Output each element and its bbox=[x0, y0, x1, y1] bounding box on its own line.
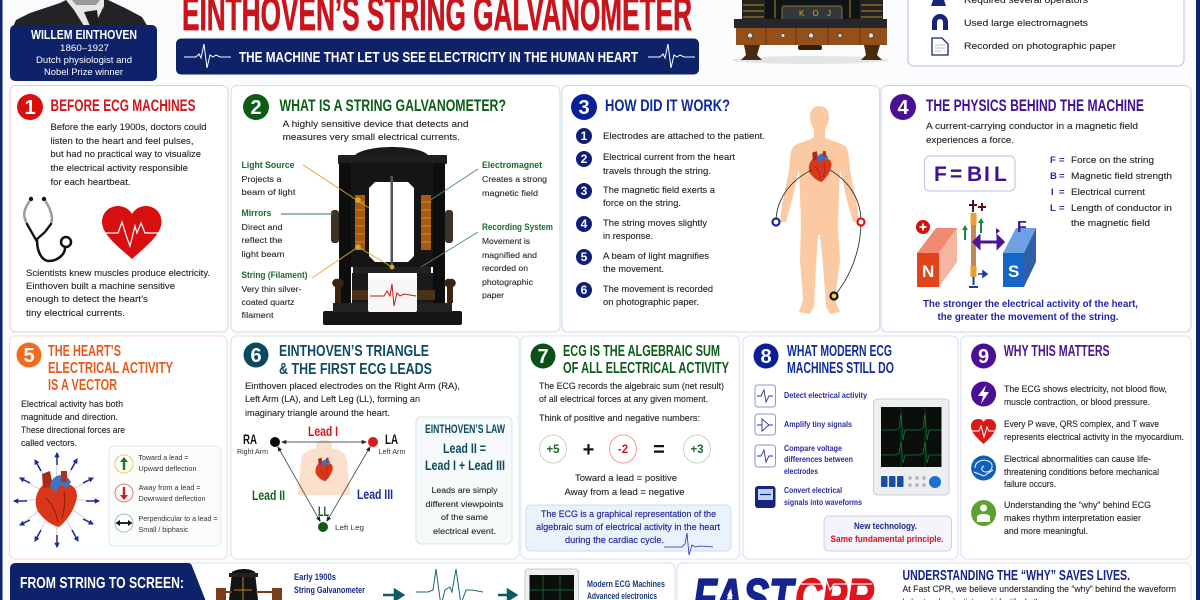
name plate bbox=[10, 25, 157, 81]
function: compare: differences between bbox=[784, 454, 853, 464]
formula legend: = bbox=[1059, 155, 1065, 166]
modern ECG label: Modern ECG Machines bbox=[587, 579, 665, 589]
name plate: Nobel Prize winner bbox=[44, 67, 124, 78]
step 4 bbox=[576, 216, 707, 242]
algebraic text: of all electrical forces at any given moment. bbox=[539, 394, 708, 405]
label: recording system: magnified and bbox=[482, 250, 537, 260]
step 3: 3 bbox=[581, 184, 588, 198]
callout: graphical representation bbox=[526, 505, 731, 555]
illustration: magnets and string: N bbox=[922, 262, 934, 281]
illustration: magnets and string: S bbox=[1008, 262, 1019, 281]
label: string filament: filament bbox=[242, 310, 274, 320]
Einthoven's law box: different viewpoints bbox=[426, 499, 504, 509]
label: recording system: paper bbox=[482, 290, 504, 300]
badge 4: 4 bbox=[897, 97, 909, 119]
label: string filament bbox=[242, 270, 308, 320]
illustration: human body with electrodes bbox=[772, 106, 864, 314]
label: mirrors: light beam bbox=[242, 249, 284, 259]
illustration: magnets and string: F bbox=[1017, 219, 1027, 236]
heading 2: WHAT IS A STRING GALVANOMETER? bbox=[280, 96, 506, 115]
function: compare: electrodes bbox=[784, 466, 818, 476]
badge 3 bbox=[571, 94, 597, 120]
badge 5: 5 bbox=[23, 345, 35, 367]
badge 5 bbox=[16, 342, 42, 368]
arrow 1 bbox=[383, 590, 403, 600]
equation bbox=[540, 435, 710, 463]
diagram: Einthoven's triangle: Lead III bbox=[357, 487, 393, 502]
triangle text bbox=[245, 381, 460, 419]
label: light source: Projects a bbox=[242, 174, 282, 184]
illustration: heart with vector arrows bbox=[14, 453, 99, 547]
heading 8: WHAT MODERN ECG bbox=[787, 343, 892, 360]
intro text bbox=[50, 122, 206, 188]
physics text: experiences a force. bbox=[926, 135, 1014, 146]
point: understanding: makes rhythm interpretation easier bbox=[1004, 513, 1142, 524]
banner: from string to screen bbox=[10, 563, 207, 600]
heading 8: MACHINES STILL DO bbox=[787, 360, 894, 377]
panel 2: what is a string galvanometer bbox=[231, 86, 560, 332]
callout: graphical representation: The ECG is a graphical representation of the bbox=[541, 508, 716, 519]
badge 2: 2 bbox=[250, 97, 262, 119]
label: string filament: Very thin silver- bbox=[242, 284, 302, 294]
badge 8: 8 bbox=[760, 346, 772, 368]
point: abnormalities: failure occurs. bbox=[1004, 479, 1056, 490]
intro text: the electrical activity responsible bbox=[50, 163, 188, 174]
function: compare bbox=[755, 443, 853, 476]
badge 6 bbox=[244, 342, 268, 368]
Einthoven's law box: EINTHOVEN’S LAW bbox=[425, 422, 505, 436]
subtitle banner: THE MACHINE THAT LET US SEE ELECTRICITY IN THE HUMAN HEART bbox=[239, 49, 638, 66]
bottom strip: from string to screen bbox=[10, 563, 675, 600]
function: amplify bbox=[755, 414, 852, 435]
badge 8 bbox=[754, 344, 778, 368]
label: recording system: Movement is bbox=[482, 236, 530, 246]
icon: operators bbox=[931, 0, 946, 6]
badge 1: 1 bbox=[24, 97, 36, 119]
step 2: Electrical current from the heart bbox=[603, 152, 735, 163]
label: light source bbox=[242, 160, 296, 197]
name plate: Dutch physiologist and bbox=[36, 55, 132, 66]
step 6: 6 bbox=[581, 283, 588, 297]
step 5: A beam of light magnifies bbox=[603, 251, 709, 262]
formula legend: F bbox=[1050, 155, 1056, 166]
Einthoven's law box: Leads are simply bbox=[432, 485, 498, 495]
heading 7 bbox=[563, 343, 729, 377]
heading 6: EINTHOVEN’S TRIANGLE bbox=[279, 343, 429, 360]
icon: heart with ECG bbox=[102, 206, 162, 259]
icon: document bbox=[932, 38, 948, 55]
illustration: early string galvanometer: K O J bbox=[799, 9, 834, 18]
closing text: Scientists knew muscles produce electricity. bbox=[26, 268, 210, 279]
illustration: magnets and string bbox=[916, 200, 1036, 287]
heading 3: HOW DID IT WORK? bbox=[605, 96, 730, 115]
arrow 2 bbox=[498, 590, 516, 600]
conclusion text: The stronger the electrical activity of the heart, bbox=[923, 299, 1138, 310]
toward a lead: Toward a lead = bbox=[138, 453, 188, 462]
closing text: enough to detect the heart’s bbox=[26, 294, 148, 305]
formula box bbox=[924, 156, 1015, 191]
label: string filament: coated quartz bbox=[242, 297, 294, 307]
panel 8: what modern ECG machines still do bbox=[743, 336, 958, 559]
step 5: the movement. bbox=[603, 264, 664, 275]
diagram: Einthoven's triangle: Right Arm bbox=[237, 447, 268, 456]
heading 7: ECG IS THE ALGEBRAIC SUM bbox=[563, 343, 720, 360]
closing text: tiny electrical currents. bbox=[26, 308, 125, 319]
function: detect bbox=[755, 385, 867, 407]
label: mirrors: Mirrors bbox=[242, 208, 272, 218]
diagram: Einthoven's triangle: Left Arm bbox=[378, 447, 406, 456]
illustration: mini monitor bbox=[525, 569, 578, 600]
formula legend: = bbox=[1059, 171, 1065, 182]
heading 5: THE HEART’S bbox=[48, 343, 121, 360]
illustration: modern ECG monitor bbox=[874, 399, 949, 495]
equation: +5 bbox=[546, 444, 560, 456]
label: recording system: Recording System bbox=[482, 222, 553, 232]
diagram: Einthoven's triangle: Left Leg bbox=[335, 523, 364, 532]
vector text bbox=[21, 399, 125, 449]
illustration: early string galvanometer bbox=[732, 0, 888, 64]
point: waves: represents electrical activity in the myocardium. bbox=[1004, 432, 1184, 443]
point: understanding: Understanding the “why” behind ECG bbox=[1004, 500, 1151, 511]
sign rule text bbox=[564, 473, 684, 498]
badge 4 bbox=[890, 94, 916, 120]
Einthoven's law box: Lead II = bbox=[443, 440, 486, 456]
panel 9: why this matters bbox=[961, 336, 1191, 559]
point: waves bbox=[971, 419, 1184, 444]
formula legend bbox=[1050, 155, 1172, 229]
step 5 bbox=[576, 249, 709, 275]
callout: same principle bbox=[824, 516, 952, 551]
function: convert: Convert electrical bbox=[784, 485, 842, 495]
step 1 bbox=[576, 128, 765, 144]
heading 6: & THE FIRST ECG LEADS bbox=[279, 361, 432, 378]
step 6 bbox=[576, 282, 713, 308]
label: light source: Light Source bbox=[242, 160, 294, 170]
physics text bbox=[926, 121, 1138, 146]
badge 9 bbox=[971, 344, 996, 368]
sign rule text: Toward a lead = positive bbox=[575, 473, 677, 484]
step 2: 2 bbox=[581, 152, 588, 166]
step 4: The string moves slightly bbox=[603, 218, 707, 229]
badge 7: 7 bbox=[537, 346, 549, 368]
panel 1: before ECG machines bbox=[10, 86, 228, 332]
step 6: The movement is recorded bbox=[603, 284, 713, 295]
formula legend: Length of conductor in bbox=[1071, 203, 1172, 214]
function: convert bbox=[755, 485, 862, 508]
heading 9: WHY THIS MATTERS bbox=[1004, 343, 1110, 360]
perpendicular to a lead: Perpendicular to a lead = bbox=[138, 514, 218, 523]
function: compare: Compare voltage bbox=[784, 443, 842, 453]
Einthoven's law box: Lead I + Lead III bbox=[425, 457, 505, 473]
Fast CPR text bbox=[902, 584, 1176, 600]
algebraic text bbox=[539, 381, 724, 424]
heading 5 bbox=[48, 343, 173, 394]
sign rule text: Away from a lead = negative bbox=[564, 487, 684, 498]
point: electricity bbox=[971, 382, 1167, 408]
panel 7: algebraic sum bbox=[521, 336, 740, 559]
step 2: travels through the string. bbox=[603, 166, 711, 177]
early 1900s label: Early 1900s bbox=[294, 572, 336, 582]
point: electricity: muscle contraction, or blood pressure. bbox=[1004, 397, 1150, 408]
intro text: for each heartbeat. bbox=[50, 177, 130, 188]
label: electromagnet bbox=[482, 160, 547, 198]
badge 9: 9 bbox=[978, 346, 989, 368]
triangle text: Einthoven placed electrodes on the Right Arm (RA), bbox=[245, 381, 460, 392]
away from a lead: Away from a lead = bbox=[138, 483, 200, 492]
icon: stethoscope bbox=[24, 197, 71, 261]
formula legend: Magnetic field strength bbox=[1071, 171, 1172, 182]
badge 3: 3 bbox=[578, 97, 590, 119]
panel 3: how did it work bbox=[562, 86, 880, 332]
step 1: 1 bbox=[581, 129, 588, 143]
triangle text: Left Arm (LA), and Left Leg (LL), forming an bbox=[245, 394, 420, 405]
badge 7 bbox=[530, 344, 556, 368]
electromagnets text: Used large electromagnets bbox=[964, 18, 1088, 29]
portrait of Willem Einthoven bbox=[13, 0, 148, 27]
diagram: Einthoven's triangle: Lead II bbox=[252, 488, 285, 503]
ECG trace bbox=[416, 569, 483, 600]
intro text: listen to the heart and feel pulses, bbox=[50, 136, 194, 147]
formula box: F bbox=[934, 163, 947, 186]
toward a lead bbox=[115, 453, 196, 473]
panel 6: Einthoven's triangle bbox=[231, 336, 519, 559]
diagram: Einthoven's triangle bbox=[237, 424, 406, 532]
step 3: The magnetic field exerts a bbox=[603, 185, 716, 196]
label: mirrors bbox=[242, 208, 284, 259]
formula box: L bbox=[994, 163, 1007, 186]
heading 7: OF ALL ELECTRICAL ACTIVITY bbox=[563, 360, 729, 377]
heading 6 bbox=[279, 343, 432, 378]
equation: +3 bbox=[690, 444, 704, 456]
heading 1: BEFORE ECG MACHINES bbox=[50, 96, 196, 115]
formula box: I bbox=[984, 163, 990, 186]
illustration: mini galvanometer bbox=[216, 569, 282, 600]
modern ECG label bbox=[587, 579, 665, 600]
icon: electromagnet bbox=[932, 14, 948, 30]
formula legend: I bbox=[1051, 187, 1054, 198]
step 3: force on the string. bbox=[603, 198, 681, 209]
panel 5: vector bbox=[10, 336, 227, 559]
Fast CPR text: At Fast CPR, we believe understanding the “why” behind the waveform bbox=[902, 584, 1176, 595]
intro text: Before the early 1900s, doctors could bbox=[50, 122, 206, 133]
formula legend: B bbox=[1050, 171, 1057, 182]
photographic paper text: Recorded on photographic paper bbox=[964, 41, 1117, 52]
conclusion text bbox=[923, 299, 1138, 323]
step 4: in response. bbox=[603, 231, 653, 242]
step 5: 5 bbox=[581, 250, 588, 264]
badge 1 bbox=[17, 94, 43, 120]
label: string filament: String (Filament) bbox=[242, 270, 308, 280]
label: electromagnet: magnetic field bbox=[482, 188, 538, 198]
definition text bbox=[282, 119, 468, 143]
point: understanding: and more meaningful. bbox=[1004, 526, 1088, 537]
formula legend: = bbox=[1059, 187, 1065, 198]
point: understanding bbox=[971, 500, 1151, 537]
triangle text: imaginary triangle around the heart. bbox=[245, 408, 390, 419]
point: abnormalities: threatening conditions before mechanical bbox=[1004, 467, 1159, 478]
function: amplify: Amplify tiny signals bbox=[784, 419, 852, 429]
point: waves: Every P wave, QRS complex, and T wave bbox=[1004, 419, 1159, 430]
label: mirrors: Direct and bbox=[242, 222, 283, 232]
closing text bbox=[26, 268, 210, 319]
label: recording system: photographic bbox=[482, 277, 534, 287]
Einthoven's law box bbox=[416, 417, 512, 544]
definition text: measures very small electrical currents. bbox=[282, 132, 460, 143]
algebraic text: The ECG records the algebraic sum (net result) bbox=[539, 381, 724, 392]
diagram: Einthoven's triangle: Lead I bbox=[308, 424, 338, 439]
diagram: Einthoven's triangle: LL bbox=[318, 504, 329, 519]
vector text: magnitude and direction. bbox=[21, 412, 118, 423]
equation: -2 bbox=[618, 444, 628, 456]
point: abnormalities bbox=[971, 454, 1159, 490]
formula legend: L bbox=[1050, 203, 1056, 214]
callout: graphical representation: during the cardiac cycle. bbox=[565, 534, 664, 545]
formula legend: Electrical current bbox=[1071, 187, 1145, 198]
label: recording system: recorded on bbox=[482, 263, 528, 273]
point: electricity: The ECG shows electricity, not blood flow, bbox=[1004, 384, 1167, 395]
banner: from string to screen: FROM STRING TO SCREEN: bbox=[20, 575, 184, 592]
heading 5: ELECTRICAL ACTIVITY bbox=[48, 360, 173, 377]
leader lines bbox=[281, 165, 478, 278]
algebraic text: Think of positive and negative numbers: bbox=[539, 413, 700, 424]
definition text: A highly sensitive device that detects and bbox=[282, 119, 468, 130]
away from a lead: Downward deflection bbox=[138, 494, 206, 503]
illustration: galvanometer machine bbox=[323, 147, 462, 325]
label: light source: beam of light bbox=[242, 187, 296, 197]
point: abnormalities: Electrical abnormalities can cause life- bbox=[1004, 454, 1151, 465]
diagram: Einthoven's triangle: LA bbox=[385, 431, 398, 447]
step 6: on photographic paper. bbox=[603, 297, 699, 308]
formula legend: the magnetic field bbox=[1071, 218, 1150, 229]
perpendicular to a lead bbox=[115, 514, 218, 534]
label: electromagnet: Creates a strong bbox=[482, 174, 547, 184]
formula box: B bbox=[967, 163, 982, 186]
equation: + bbox=[583, 439, 594, 461]
label: electromagnet: Electromagnet bbox=[482, 160, 542, 170]
callout: graphical representation: algebraic sum of electrical activity in the heart bbox=[536, 521, 720, 532]
legend: deflection bbox=[109, 446, 221, 546]
formula legend: = bbox=[1059, 203, 1065, 214]
badge 2 bbox=[243, 94, 269, 120]
name plate: WILLEM EINTHOVEN bbox=[31, 27, 137, 42]
Einthoven's law box: of the same bbox=[441, 512, 488, 522]
formula box: = bbox=[950, 163, 962, 186]
step 1: Electrodes are attached to the patient. bbox=[603, 131, 765, 142]
intro text: but had no practical way to visualize bbox=[50, 149, 201, 160]
panel 4: the physics behind the machine bbox=[881, 86, 1191, 332]
callout: same principle: Same fundamental principle. bbox=[830, 534, 944, 544]
perpendicular to a lead: Small / biphasic bbox=[138, 525, 189, 534]
early 1900s label: String Galvanometer bbox=[294, 585, 365, 595]
panel: Fast CPR bbox=[677, 563, 1191, 600]
conclusion text: the greater the movement of the string. bbox=[938, 312, 1119, 323]
function: detect: Detect electrical activity bbox=[784, 390, 867, 400]
badge 6: 6 bbox=[250, 345, 262, 367]
label: mirrors: reflect the bbox=[242, 235, 283, 245]
heading 5: IS A VECTOR bbox=[48, 377, 117, 394]
physics text: A current-carrying conductor in a magnetic field bbox=[926, 121, 1138, 132]
panel: historical notes bbox=[908, 0, 1184, 66]
name plate: 1860–1927 bbox=[60, 43, 109, 54]
closing text: Einthoven built a machine sensitive bbox=[26, 281, 175, 292]
Einthoven's law box: electrical event. bbox=[433, 526, 496, 536]
vector text: These directional forces are bbox=[21, 425, 125, 436]
heading 8 bbox=[787, 343, 894, 377]
label: recording system bbox=[482, 222, 553, 300]
step 4: 4 bbox=[581, 217, 588, 231]
early 1900s label bbox=[294, 572, 365, 595]
formula legend: Force on the string bbox=[1071, 155, 1154, 166]
equation: = bbox=[653, 439, 665, 461]
toward a lead: Upward deflection bbox=[138, 464, 196, 473]
vector text: Electrical activity has both bbox=[21, 399, 123, 410]
step 2 bbox=[576, 151, 735, 177]
step 3 bbox=[576, 183, 716, 209]
vector text: called vectors. bbox=[21, 438, 77, 449]
away from a lead bbox=[115, 483, 206, 503]
callout: same principle: New technology. bbox=[854, 521, 917, 531]
diagram: Einthoven's triangle: RA bbox=[243, 431, 257, 447]
function: convert: signals into waveforms bbox=[784, 497, 862, 507]
subtitle banner bbox=[176, 38, 699, 74]
